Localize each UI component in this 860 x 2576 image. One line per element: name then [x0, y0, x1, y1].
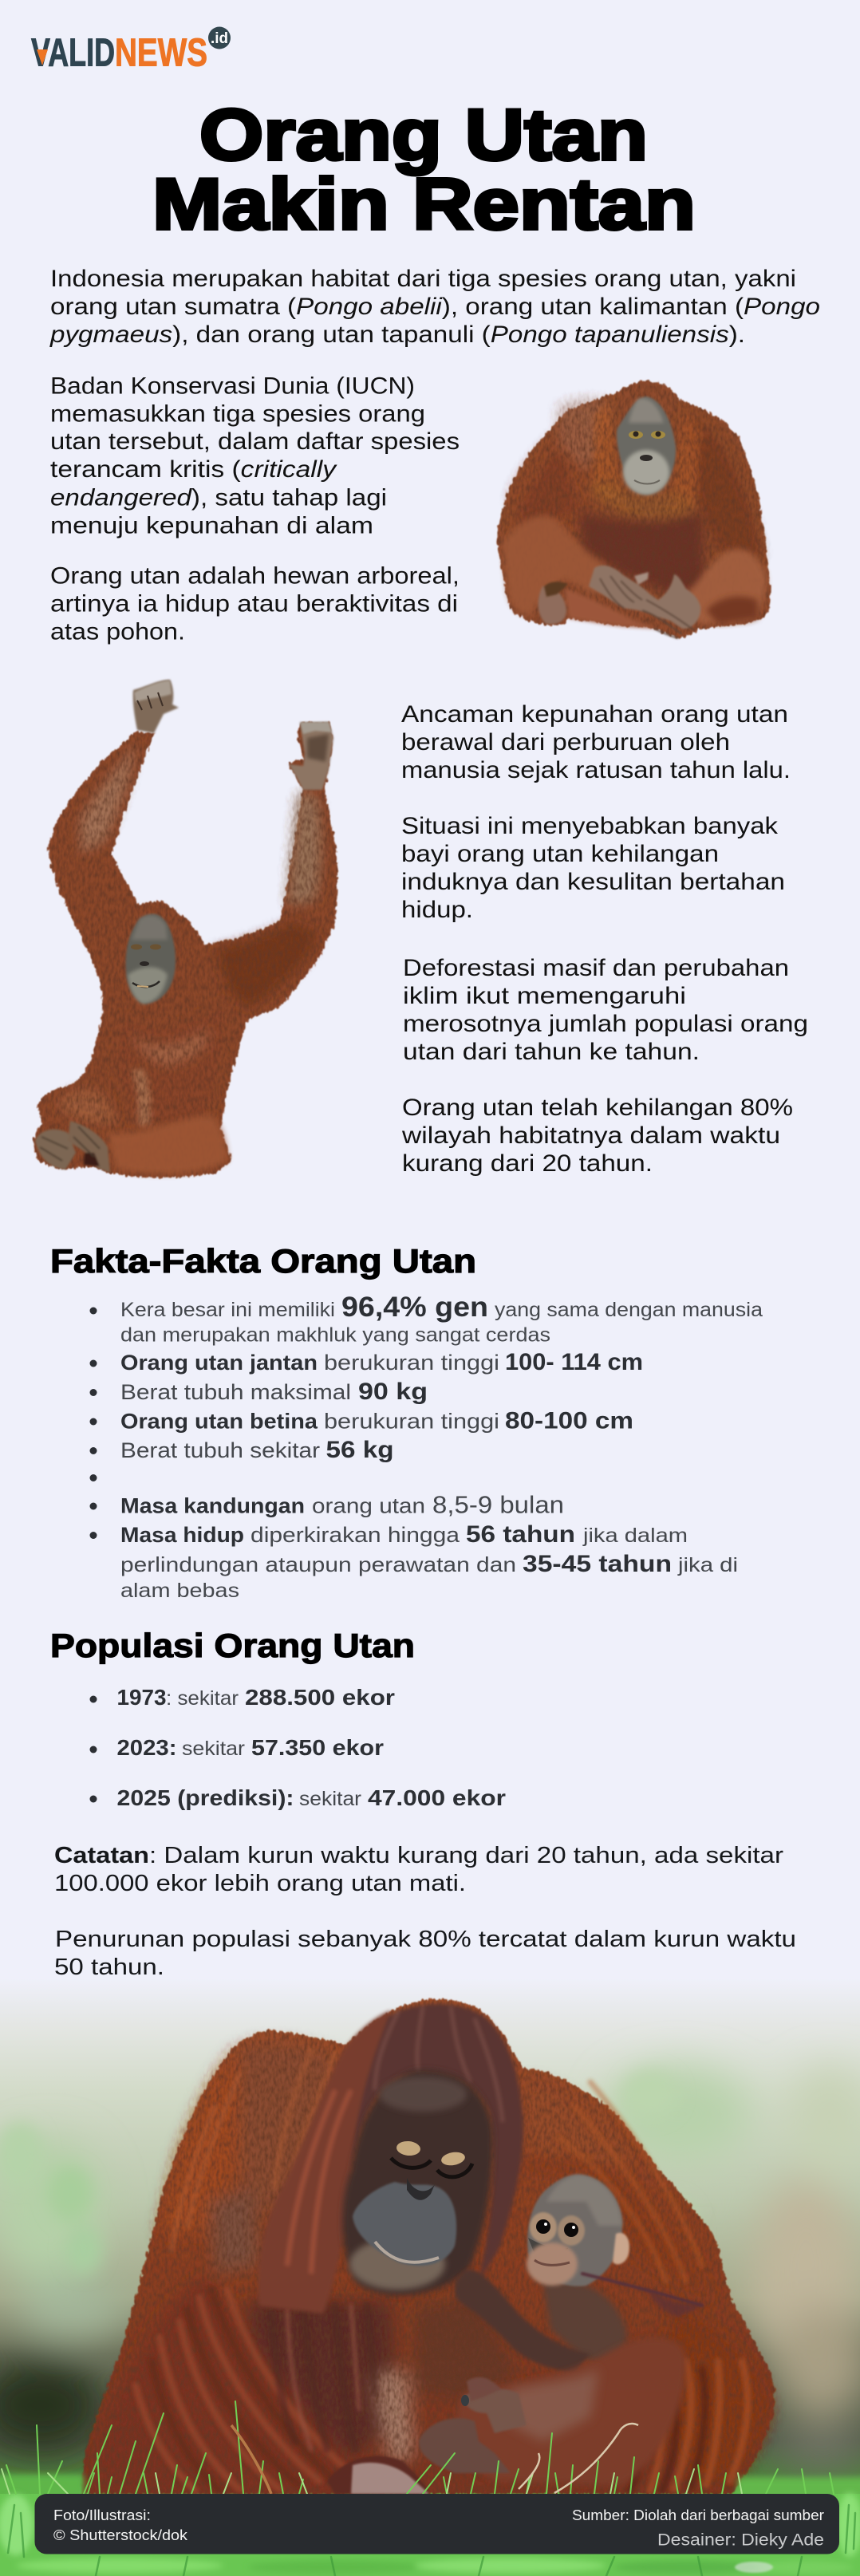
hands — [589, 566, 700, 638]
fact: lifespan: 56 tahun — [466, 1521, 575, 1548]
threat paragraph: habitat loss: kurang dari 20 tahun. — [402, 1150, 653, 1177]
fact: male weight — [120, 1379, 428, 1405]
threat paragraph: deforestation: iklim ikut memengaruhi — [403, 983, 686, 1009]
arm: right forearm — [686, 549, 766, 624]
note paragraph: : Dalam kurun waktu kurang dari 20 tahun, ada sekitar — [149, 1843, 783, 1868]
fact: male height: berukuran tinggi — [324, 1351, 499, 1375]
image: orangutan with raised arms — [34, 680, 337, 1178]
threat paragraph: hunting: manusia sejak ratusan tahun lalu. — [401, 757, 791, 783]
intro paragraph: pygmaeus ), dan orang utan tapanuli ( Pongo tapanuliensis ). — [49, 322, 745, 348]
arm: lower folded — [108, 1115, 227, 1174]
lower torso band — [565, 589, 658, 629]
intro paragraph — [49, 266, 820, 348]
fact: lifespan: Masa hidup — [120, 1523, 244, 1547]
designer credit: Desainer: Dieky Ade — [657, 2531, 824, 2550]
population list — [89, 1685, 506, 1810]
IUCN paragraph: utan tersebut, dalam daftar spesies — [50, 428, 460, 455]
feet — [35, 1121, 110, 1173]
note paragraph — [54, 1843, 796, 1980]
fact: female height: Orang utan betina — [120, 1409, 318, 1433]
threat paragraph: habitat loss — [401, 1095, 793, 1177]
hair streaks — [136, 2050, 748, 2491]
photo: mother and baby orangutan on grass — [0, 1970, 860, 2576]
fact: male height: Orang utan jantan — [120, 1351, 318, 1375]
IUCN paragraph: terancam kritis ( critically — [50, 456, 337, 483]
blurred background — [0, 1970, 860, 2576]
fact: gestation: 8,5-9 bulan — [432, 1490, 564, 1519]
IUCN paragraph — [50, 373, 460, 539]
arboreal paragraph: atas pohon. — [50, 619, 185, 645]
population 2025 prediction: 47.000 ekor — [368, 1785, 506, 1810]
threat paragraph: hunting: Ancaman kepunahan orang utan — [401, 701, 788, 728]
fact: gene similarity — [120, 1292, 763, 1347]
arm: left forearm — [503, 515, 618, 616]
caption bar — [35, 2494, 839, 2554]
fact: lifespan — [120, 1521, 738, 1602]
fact: male weight: 90 kg — [358, 1379, 428, 1405]
fact: gene similarity: 96,4% gen — [341, 1292, 488, 1323]
IUCN paragraph: memasukkan tiga spesies orang — [50, 400, 425, 428]
population 1973: 1973 — [116, 1685, 166, 1710]
fact: lifespan: diperkirakan hingga — [251, 1523, 460, 1547]
fact: gene similarity: dan merupakan makhluk yang sangat cerdas — [120, 1324, 550, 1347]
threat paragraph: deforestation: merosotnya jumlah populasi orang — [403, 1011, 808, 1037]
population 2023 — [116, 1735, 384, 1760]
mother arm and hand — [419, 2337, 686, 2485]
logo: Validnews.id: .id — [211, 30, 228, 47]
mother face — [342, 2069, 493, 2295]
hand: raised left — [133, 680, 179, 733]
logo: Validnews.id: NEWS — [115, 32, 207, 75]
fact: male height — [120, 1349, 643, 1375]
knee — [538, 586, 566, 624]
photo credit: Foto/Illustrasi: — [53, 2507, 151, 2523]
fact: gene similarity: Kera besar ini memiliki — [120, 1299, 335, 1321]
intro paragraph: orang utan sumatra ( Pongo abelii ), orang utan kalimantan ( Pongo — [50, 294, 820, 320]
fact: male height: 100- 114 cm — [505, 1349, 643, 1375]
note paragraph: 100.000 ekor lebih orang utan mati. — [54, 1871, 466, 1896]
fact: lifespan: alam bebas — [120, 1580, 239, 1602]
threat paragraph: orphaned babies: hidup. — [401, 897, 473, 923]
heading: Populasi Orang Utan: Populasi Orang Utan — [50, 1627, 415, 1664]
threat paragraph: habitat loss: Orang utan telah kehilangan 80% — [402, 1095, 793, 1121]
population 2025 prediction: sekitar — [299, 1788, 361, 1810]
threat paragraph: deforestation — [403, 955, 808, 1065]
source credit: Sumber: Diolah dari berbagai sumber — [572, 2507, 824, 2523]
fact: gestation: orang utan — [312, 1493, 425, 1517]
population 2023: 2023: — [116, 1735, 177, 1760]
threat paragraph: deforestation: utan dari tahun ke tahun. — [403, 1039, 700, 1065]
arboreal paragraph: Orang utan adalah hewan arboreal, — [50, 563, 460, 589]
threat paragraph: hunting: berawal dari perburuan oleh — [401, 729, 730, 755]
threat paragraph: deforestation: Deforestasi masif dan perubahan — [403, 955, 789, 981]
image: sitting orangutan — [497, 381, 770, 638]
population 1973 — [116, 1685, 395, 1710]
IUCN paragraph: endangered ), satu tahap lagi — [50, 485, 387, 511]
fact: lifespan: 35-45 tahun — [523, 1551, 672, 1577]
fact: male weight: Berat tubuh maksimal — [120, 1380, 351, 1404]
mother body — [81, 1999, 775, 2494]
bullets — [89, 1307, 97, 1539]
fact: female weight — [120, 1437, 394, 1463]
fact: lifespan: jika dalam — [582, 1525, 688, 1547]
threat paragraph: orphaned babies: Situasi ini menyebabkan banyak — [401, 813, 779, 839]
hand: raised right — [289, 722, 333, 790]
fact: female height: 80-100 cm — [505, 1407, 633, 1434]
title: Orang Utan — [199, 95, 648, 176]
note paragraph: Penurunan populasi sebanyak 80% tercatat dalam kurun waktu — [55, 1927, 796, 1952]
note paragraph: 50 tahun. — [54, 1955, 164, 1980]
note paragraph: Catatan — [54, 1843, 149, 1868]
photo credit: © Shutterstock/dok — [53, 2527, 188, 2543]
threat paragraph: habitat loss: wilayah habitatnya dalam waktu — [401, 1122, 780, 1149]
population 2023: sekitar — [182, 1738, 245, 1760]
population 1973: : sekitar — [166, 1687, 239, 1710]
face — [617, 396, 676, 495]
photo credit — [53, 2507, 188, 2543]
heading: Fakta-Fakta Orang Utan: Fakta-Fakta Orang Utan — [50, 1242, 476, 1280]
fact: lifespan: jika di — [677, 1554, 738, 1576]
fact: female height — [120, 1407, 633, 1434]
facts list — [89, 1292, 763, 1602]
intro paragraph: Indonesia merupakan habitat dari tiga spesies orang utan, yakni — [50, 266, 796, 292]
fact: female weight: Berat tubuh sekitar — [120, 1438, 320, 1462]
fact: gestation — [120, 1490, 564, 1519]
population 2025 prediction — [116, 1785, 506, 1810]
fact: gene similarity: yang sama dengan manusia — [495, 1299, 763, 1321]
arboreal paragraph — [50, 563, 460, 645]
baby orangutan — [455, 2175, 706, 2373]
grass — [0, 2401, 860, 2576]
fact: female weight: 56 kg — [325, 1437, 394, 1463]
face — [126, 914, 176, 1004]
population 2025 prediction: 2025 (prediksi): — [116, 1785, 294, 1810]
IUCN paragraph: menuju kepunahan di alam — [50, 512, 373, 539]
hair over forehead and sides — [258, 2004, 523, 2314]
threat paragraph: orphaned babies: bayi orang utan kehilangan — [401, 841, 719, 867]
mother left hand — [327, 2456, 429, 2494]
arboreal paragraph: artinya ia hidup atau beraktivitas di — [50, 590, 458, 617]
fact: lifespan: perlindungan ataupun perawatan dan — [120, 1552, 516, 1576]
fact: gestation: Masa kandungan — [120, 1493, 305, 1517]
population 1973: 288.500 ekor — [245, 1685, 395, 1710]
title — [152, 95, 696, 245]
fur tones — [96, 2045, 770, 2494]
threat paragraph: hunting — [401, 701, 791, 783]
title: Makin Rentan — [152, 164, 696, 245]
logo: Validnews.id — [31, 27, 231, 75]
logo: Validnews.id: VALID — [31, 32, 115, 75]
threat paragraph: orphaned babies — [401, 813, 785, 923]
fact: female height: berukuran tinggi — [324, 1409, 499, 1433]
population 2023: 57.350 ekor — [251, 1735, 384, 1760]
IUCN paragraph: Badan Konservasi Dunia (IUCN) — [50, 373, 415, 399]
threat paragraph: orphaned babies: induknya dan kesulitan bertahan — [401, 869, 785, 895]
